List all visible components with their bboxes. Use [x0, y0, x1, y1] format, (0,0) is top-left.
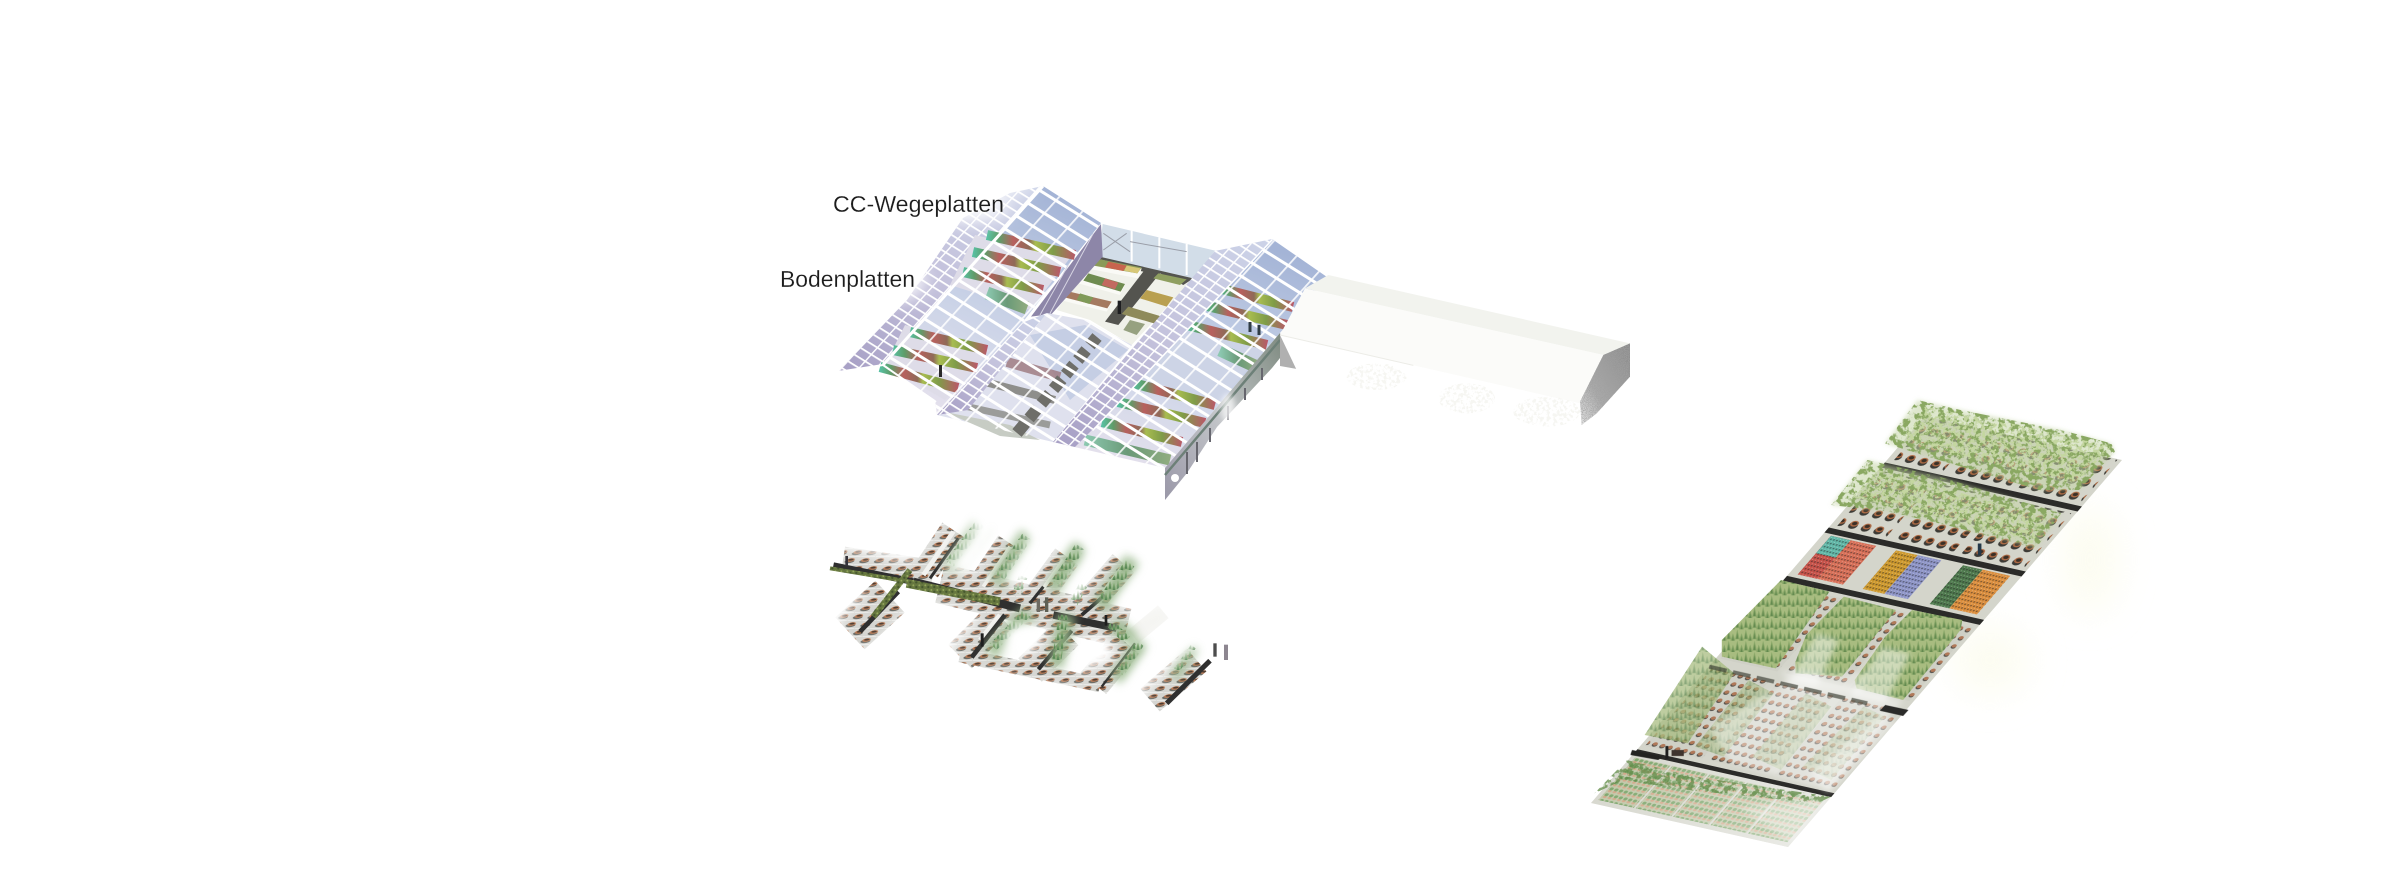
glass panes [937, 313, 1132, 442]
slab with sections [1591, 416, 2122, 847]
lattice strip [1053, 239, 1272, 447]
dark paths [1095, 256, 1193, 325]
fade behind labels [865, 175, 1032, 300]
courtyard floor [1057, 257, 1193, 345]
conifer fade [1788, 633, 1910, 703]
person on glass [939, 365, 942, 377]
worker with cart [1665, 746, 1684, 759]
climbing vines on the main path [830, 568, 1000, 617]
pot grid rows [843, 530, 1197, 700]
glass panes with plant rows [1053, 239, 1327, 468]
conifer rows [950, 523, 1193, 673]
conifer blocks [1722, 580, 1962, 700]
section 3 base [1720, 585, 1973, 701]
tree canopy, front row [1831, 460, 2061, 548]
pale walkways [923, 532, 1163, 640]
visitors [845, 556, 1228, 660]
tree canopy, back row [1885, 400, 2115, 490]
pale saplings [1645, 647, 1885, 780]
garden fragment with conifers [830, 523, 1228, 703]
flower beds [1798, 536, 2010, 615]
courtyard back glass wall [1098, 224, 1215, 280]
gardener [1978, 543, 1981, 555]
concrete slab [1591, 416, 2122, 847]
dark crossing paths [1634, 462, 2082, 797]
section 6 pots [1894, 418, 2117, 502]
glass panes with plant rows [838, 186, 1101, 415]
label: Bodenplatten: Bodenplatten [780, 266, 915, 292]
greenhouse [838, 175, 1630, 500]
ivy on bottom path [1594, 760, 1831, 803]
soft green haze [950, 523, 1193, 680]
white-faded connected hall [1280, 275, 1630, 428]
section 5 pots [1836, 472, 2071, 569]
middle wing roof [937, 313, 1132, 442]
lattice strip [937, 313, 1047, 415]
white clearing holes [1007, 626, 1113, 665]
lattice strip [838, 186, 1043, 372]
foliage overlays [1594, 400, 2115, 843]
mist [1709, 670, 1903, 843]
hall roof [1305, 275, 1630, 355]
hall gable end [1580, 343, 1630, 425]
dark mottled path strip [1709, 667, 1867, 703]
left wing roof [838, 186, 1101, 415]
courtyard with planting beds [1031, 224, 1215, 345]
section 1 fade [1591, 753, 1831, 847]
planting field on slab [1591, 400, 2122, 847]
beds [1060, 258, 1187, 335]
people on glass [1250, 322, 1259, 335]
faint ground mist [1950, 505, 2120, 695]
right wing roof [1053, 239, 1327, 468]
section 1: small plants [1598, 757, 1824, 842]
dark walkways [833, 538, 1210, 703]
dividing wall [1031, 224, 1103, 317]
person [1118, 301, 1121, 314]
section 2: potted saplings [1645, 668, 1901, 788]
label: CC-Wegeplatten: CC-Wegeplatten [833, 191, 1004, 217]
ghosted shrubs [1347, 363, 1580, 427]
glasshouse side wall [1165, 333, 1297, 500]
